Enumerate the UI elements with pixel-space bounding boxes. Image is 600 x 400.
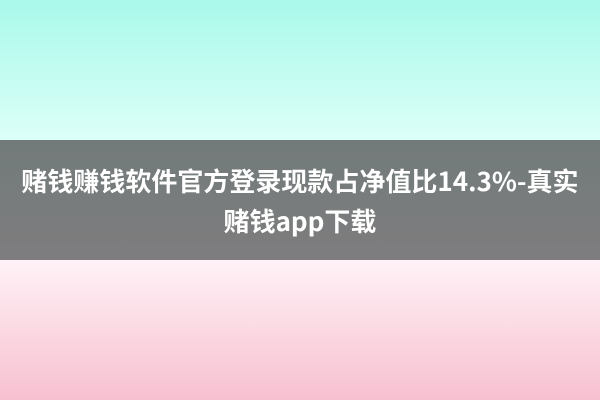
title: [21, 162, 579, 239]
panel: dark title band: [0, 140, 600, 260]
title: 赌钱app下载: [224, 202, 376, 239]
title: 赌钱赚钱软件官方登录现款占净值比14.3%-真实: [21, 162, 579, 199]
